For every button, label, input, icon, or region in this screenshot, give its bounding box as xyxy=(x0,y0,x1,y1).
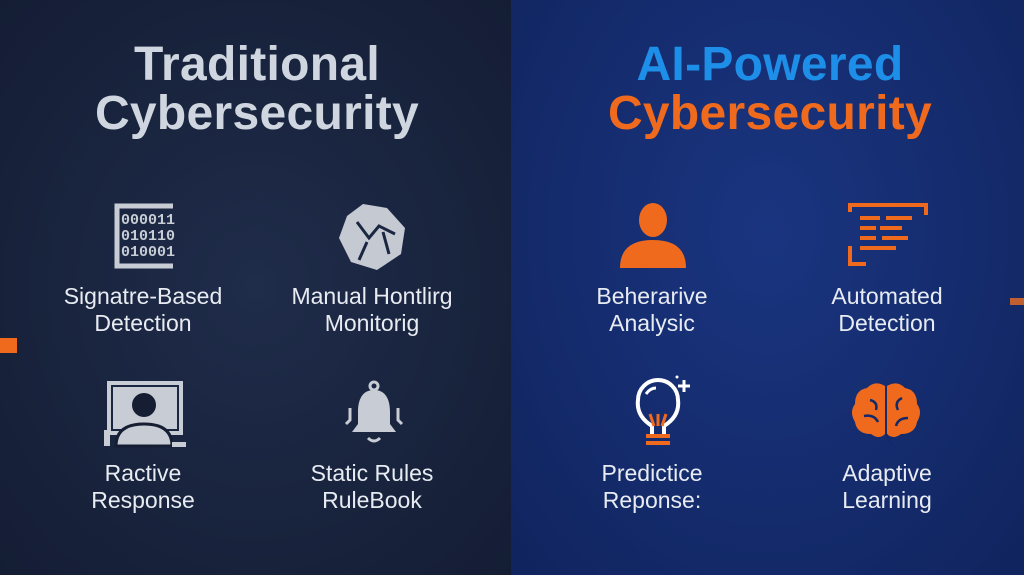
label: manual: Manual Hontlirg xyxy=(291,283,453,309)
label: automated: Detection xyxy=(838,310,936,336)
accent: right orange mark xyxy=(1010,298,1024,305)
panel: traditional xyxy=(0,0,511,575)
label: signature: Signatre-Based xyxy=(64,283,222,309)
icon: person at computer xyxy=(104,381,186,448)
icon: binary: 010110 xyxy=(121,228,175,245)
label: automated xyxy=(831,283,943,336)
panel: ai-powered xyxy=(511,0,1024,575)
label: manual xyxy=(291,283,453,336)
icon: shield polygon xyxy=(339,204,405,270)
icon: binary: 010001 xyxy=(121,244,175,261)
icon: lightbulb xyxy=(636,376,690,445)
label: adaptive: Adaptive xyxy=(842,460,932,486)
title: ai-powered: AI-Powered xyxy=(636,38,904,91)
label: behavioral: Beherarive xyxy=(596,283,708,309)
label: adaptive: Learning xyxy=(842,487,932,513)
label: reactive: Ractive xyxy=(105,460,181,486)
icon: document lines xyxy=(848,203,928,266)
label: static rules: Static Rules xyxy=(311,460,433,486)
label: predictive: Predictice xyxy=(602,460,702,486)
accent: left orange mark xyxy=(0,338,17,353)
icon: brain xyxy=(852,383,920,437)
label: reactive xyxy=(91,460,195,513)
icon: user xyxy=(620,203,686,268)
label: behavioral: Analysic xyxy=(609,310,695,336)
label: automated: Automated xyxy=(831,283,943,309)
label: manual: Monitorig xyxy=(325,310,419,336)
icon: bell xyxy=(345,380,403,442)
label: static rules xyxy=(311,460,433,513)
label: signature: Detection xyxy=(94,310,192,336)
title: ai-powered xyxy=(608,38,932,140)
label: signature xyxy=(64,283,222,336)
label: reactive: Response xyxy=(91,487,195,513)
label: behavioral xyxy=(596,283,708,336)
icon: binary xyxy=(114,204,175,268)
label: static rules: RuleBook xyxy=(322,487,422,513)
title: traditional xyxy=(95,38,419,140)
label: predictive: Reponse: xyxy=(603,487,701,513)
icon: binary: 000011 xyxy=(121,212,175,229)
label: adaptive xyxy=(842,460,932,513)
label: predictive xyxy=(602,460,702,513)
title: traditional: Traditional xyxy=(134,38,380,91)
title: traditional: Cybersecurity xyxy=(95,87,419,140)
title: ai-powered: Cybersecurity xyxy=(608,87,932,140)
